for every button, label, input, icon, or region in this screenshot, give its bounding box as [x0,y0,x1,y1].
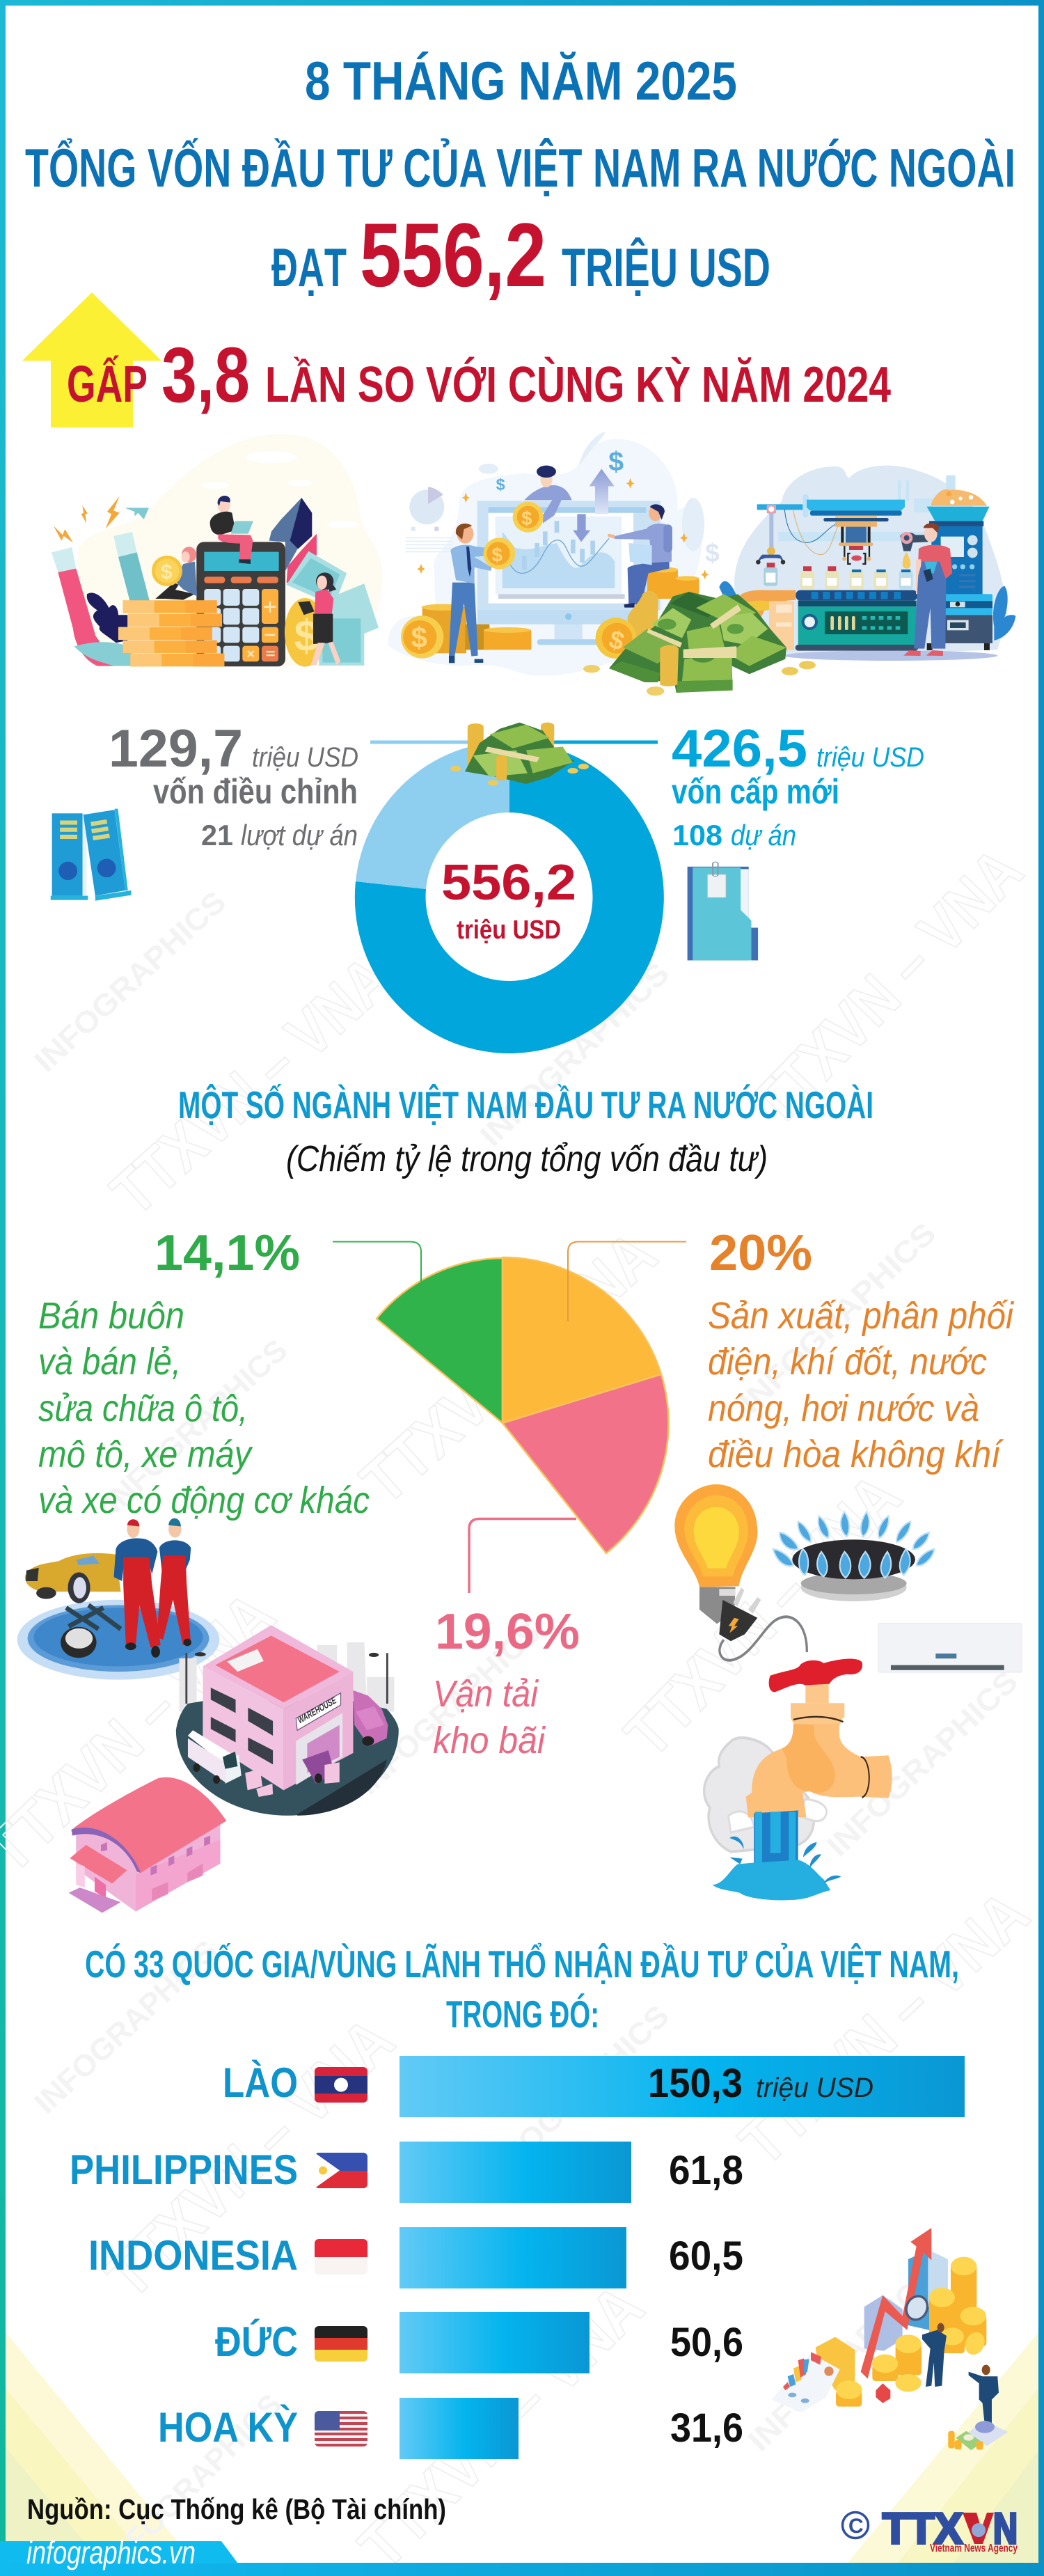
logo: TTXVN [842,2505,1018,2554]
bar chart: investment by country [70,2056,965,2459]
bottom bar with website: infographics.vn [26,2534,196,2570]
money pile and gold: $ [606,625,627,656]
title line: total value: ĐẠT [271,237,347,298]
logo: TTXVN: N [993,2505,1018,2553]
coins group [401,604,531,659]
watermark: INFOGRAPHICS [474,957,676,1153]
tall machine [927,489,1015,650]
source: Nguồn: Cục Thống kê (Bộ Tài chính) [27,2493,446,2525]
callout: 14.1% retail: Bán buôn [38,1295,184,1337]
callout: 19.6% transport: kho bãi [433,1720,546,1761]
robot arm and press [756,494,905,565]
illustration: warehouse: WAREHOUSE [296,1695,338,1725]
calculator [196,542,285,666]
icon: binders [51,809,132,901]
row: Germany: 50,6 [670,2320,743,2365]
small chart items [406,487,452,552]
callout: 20% utilities [708,1225,1015,1475]
donut centre label: 556,2 [441,855,576,911]
leader line: green [333,1242,421,1321]
coins group: $ [411,621,427,654]
row: Germany [215,2312,743,2373]
callout: adjusted capital: 129,7 [109,719,243,778]
callout: new capital: 426,5 [672,719,807,778]
row: Indonesia: INDONESIA [88,2232,298,2279]
conveyor [796,590,918,651]
callout: 19.6% transport [433,1604,580,1761]
row: Laos: 150,3 [648,2061,743,2106]
leader line: orange [568,1242,686,1321]
segment: adjusted capital [356,741,509,889]
watermark: TTXVN – VNA [346,2271,657,2576]
illustration: car repair [17,1518,219,1680]
illustration: growth chart with coins [771,2228,1008,2450]
pie slice: orange 20% [503,1257,661,1423]
illustration: gas burner [773,1512,935,1601]
row: Laos [223,2056,965,2117]
leaves behind calculator [269,498,308,571]
watermark: TTXVN – VNA [348,1218,670,1518]
icon: money on donut [450,723,589,785]
callout: new capital: 108 [672,819,722,851]
row: Laos: triệu USD [756,2073,873,2103]
woman holding coin: $ [161,561,173,584]
row: Germany: ĐỨC [215,2318,298,2365]
person above monitor: $ [521,508,532,529]
illustration: finance calculator [52,434,383,667]
callout: adjusted capital [109,719,358,851]
watermark: INFOGRAPHICS [28,1934,224,2120]
box [719,581,796,650]
illustration: investors around monitor [388,432,816,696]
big coin [285,598,326,667]
woman with clipboard [298,572,340,665]
pie chart: sectors [377,1257,668,1553]
illustration: low warehouse [69,1777,226,1913]
row: Philippines: 61,8 [669,2148,743,2193]
title line: period: 8 THÁNG NĂM 2025 [305,50,737,111]
illustration: finance calculator: $ [294,612,319,661]
row: Philippines [70,2142,743,2203]
callout: 14.1% retail [38,1225,370,1521]
logo: TTXVN: C [848,2515,864,2538]
pie slice: green 14.1% [377,1258,503,1423]
pie slice: pink 19.6% [503,1374,668,1553]
title line: total value: TRIỆU USD [562,237,770,298]
icon: folder [688,862,758,960]
watermark: TTXVN – VNA [612,1461,915,1770]
donut centre label: triệu USD [457,916,561,945]
illustration: investors around monitor: $ [496,476,505,494]
jars [764,552,913,590]
illustration: investors around monitor: $ [608,446,624,477]
watermark: INFOGRAPHICS [821,1665,1025,1863]
watermark: INFOGRAPHICS [28,885,232,1078]
callout: adjusted capital: 21 [201,819,233,851]
woman holding coin [152,547,197,600]
callout: 14.1% retail: 14,1% [155,1225,300,1281]
corner decoration: yellow triangles [6,2332,1038,2563]
donut centre label [441,855,576,945]
callout: adjusted capital: lượt dự án [241,819,358,851]
bottom bar with website [0,2534,1044,2576]
segment: new capital [355,741,664,1053]
callout: 14.1% retail: mô tô, xe máy [38,1434,253,1475]
callout: 20% utilities: điều hòa không khí [708,1434,1004,1475]
callout: 19.6% transport: 19,6% [435,1604,580,1660]
coin stack [118,600,224,666]
watermark: INFOGRAPHICS [474,1999,676,2195]
watermark: TTXVN – VNA [93,2004,407,2311]
row: United States: 31,6 [670,2405,743,2451]
investor figures [922,2323,1008,2450]
watermark: INFOGRAPHICS [742,2261,944,2458]
watermark [0,835,1043,2576]
callout: 14.1% retail: sửa chữa ô tô, [38,1388,248,1429]
watermark: TTXVN – VNA [98,943,404,1229]
callout: 19.6% transport: Vận tải [433,1673,539,1715]
row: United States: HOA KỲ [158,2404,298,2451]
watermark: INFOGRAPHICS [97,2387,288,2576]
watermark: INFOGRAPHICS [351,1615,547,1801]
paper with charts [771,2352,840,2412]
watermark: INFOGRAPHICS [97,1333,294,1519]
row: Indonesia [88,2227,743,2288]
man with coin: $ [492,544,503,566]
man with laptop on coins [608,504,699,608]
subheading: share note: (Chiếm tỷ lệ trong tổng vốn đầu tư) [286,1139,768,1179]
callout: 14.1% retail: và bán lẻ, [38,1341,181,1383]
leader lines [370,741,658,744]
illustration: investors around monitor: $ [705,539,720,567]
title line: total value [271,204,770,306]
leader line: pink [469,1519,576,1593]
callout: 20% utilities: điện, khí đốt, nước [708,1341,987,1383]
callout: 20% utilities: nóng, hơi nước và [708,1388,979,1429]
banknotes [287,551,347,606]
callout: new capital: vốn cấp mới [672,772,839,811]
illustration: water tap [704,1659,892,1900]
row: Philippines: PHILIPPINES [70,2146,298,2193]
heading: recipient countries: TRONG ĐÓ: [446,1993,599,2036]
illustration: factory production line [719,466,1015,661]
row: Indonesia: 60,5 [669,2233,743,2279]
illustration: air conditioner [878,1624,1022,1672]
row: United States [158,2398,743,2459]
mechanics [114,1518,191,1658]
callout: new capital: dự án [731,819,796,851]
donut chart: total capital [355,723,664,1053]
person above monitor [513,466,572,533]
worker [903,523,952,656]
callout: adjusted capital: vốn điều chỉnh [153,772,358,811]
logo: TTXVN: TTX [883,2505,963,2553]
callout: adjusted capital: triệu USD [252,742,358,773]
monitor [477,469,661,645]
title [25,50,1015,418]
title line: comparison: 3,8 [161,331,250,418]
callout: 20% utilities: Sản xuất, phân phối [708,1295,1015,1337]
title line: total value: 556,2 [360,204,546,306]
money pile and gold [583,591,816,696]
callout: new capital [672,719,924,851]
icon: yellow up arrow [22,292,161,427]
sitting man with laptop [210,496,253,564]
heading: recipient countries [85,1942,959,2036]
illustration: warehouse [176,1625,399,1816]
callout: 20% utilities: 20% [709,1225,812,1281]
title line: comparison [67,331,891,418]
man with coin [449,524,515,663]
title line: comparison: GẤP [67,355,148,413]
callout: new capital: triệu USD [816,742,924,773]
title line: comparison: LẦN SO VỚI CÙNG KỲ NĂM 2024 [265,356,891,413]
illustration: light bulb and plug [674,1484,807,1660]
watermark: INFOGRAPHICS [734,1216,942,1420]
row: Laos: LÀO [223,2059,298,2106]
callout: 14.1% retail: và xe có động cơ khác [38,1479,370,1521]
